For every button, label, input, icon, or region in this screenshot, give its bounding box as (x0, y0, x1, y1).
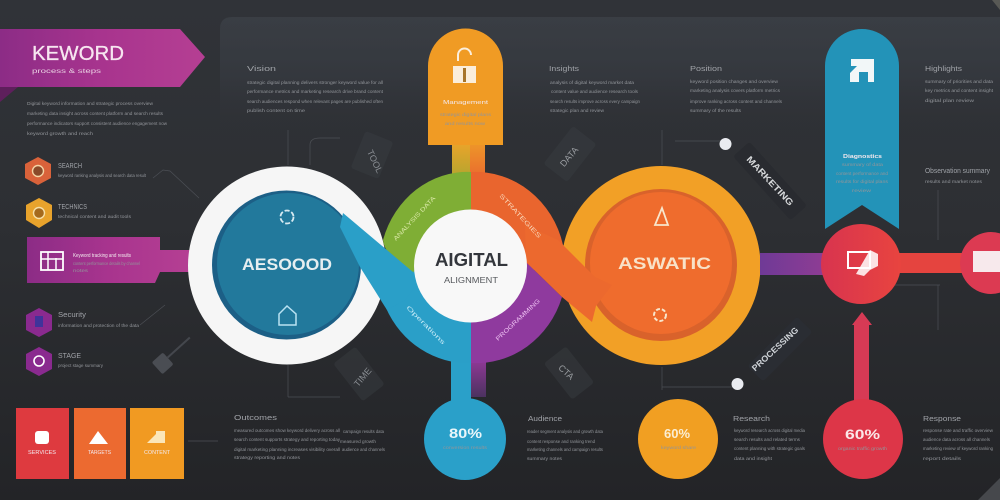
red bottom circle: 60% (845, 426, 881, 442)
center subtitle: ALIGNMENT (444, 276, 498, 285)
icon: padlock (453, 48, 476, 83)
text block: bottom right two: audience data across all channels (923, 437, 991, 442)
text block: top left (247, 66, 384, 113)
icon: gear (654, 309, 666, 321)
text block: right middle: results and market notes (925, 179, 983, 184)
left circle title: AESOOOD (242, 255, 332, 274)
text block: left of blue circle: measured growth (340, 439, 376, 444)
text block: bottom center: marketing channels and campaign results (527, 447, 604, 452)
text block: top far right (925, 66, 994, 103)
text block: top center (549, 66, 640, 113)
corner highlights (978, 0, 1000, 500)
text block: bottom left: measured outcomes show keyword delivery across all (234, 428, 340, 433)
text block: top far right: summary of priorities and data (925, 79, 993, 84)
text block: top left: strategic digital planning delivers stronger keyword value for all (247, 80, 383, 85)
dark label tags with small text: TOOL (365, 148, 384, 175)
center ring: orange stem and pill: and results now (445, 121, 486, 126)
text block: top right one: keyword position changes and overview (690, 79, 779, 84)
text block: bottom left: digital marketing planning increases visibility overall (234, 447, 340, 452)
text block: bottom right two: report details (923, 456, 962, 461)
center ring: orange stem and pill (428, 28, 503, 180)
red up arrow (852, 312, 872, 402)
icon: building (850, 59, 874, 82)
list item: orange hexagon: SEARCH (58, 163, 82, 170)
list item: yellow hexagon: TECHNICS (58, 204, 87, 211)
text block: top center: Insights (549, 66, 580, 73)
magenta tag (27, 237, 190, 283)
ribbon text: review (852, 188, 872, 193)
icon: house (279, 306, 296, 325)
ring label: blue: Operations (405, 305, 446, 346)
ring segment: blue (386, 267, 471, 363)
intro paragraph: Digital keyword information and strategic process overview (27, 101, 154, 106)
yellow bottom circle (638, 399, 718, 479)
text block: bottom right two: response rate and traffic overview (923, 428, 994, 433)
list item: orange hexagon: keyword ranking analysis and search data result (58, 173, 147, 178)
icon: network (280, 210, 294, 224)
orange diagonal band (525, 225, 612, 322)
list item: purple hexagon two: STAGE (58, 353, 81, 360)
bottom card: red (16, 408, 69, 479)
connector lines (140, 130, 940, 441)
intro paragraph: performance indicators support consistent audience engagement now (27, 121, 168, 126)
ring segment: green (383, 172, 471, 276)
center ring: orange stem and pill: Management (443, 100, 489, 106)
text block: bottom right one: content planning with strategic goals (734, 446, 806, 451)
tag text: notes (73, 268, 89, 273)
text block: top left: publish content on time (247, 108, 306, 113)
text block: bottom left: strategy reporting and notes (234, 455, 301, 460)
text block: right middle: Observation summary (925, 168, 990, 175)
text block: top right one: summary of the results (690, 108, 742, 113)
tag text (73, 253, 140, 273)
ring label: green: ANALYSIS DATA (393, 196, 437, 242)
list item: purple hexagon one (26, 308, 139, 337)
yellow bottom circle: 60% (664, 426, 690, 441)
text block: top far right: key metrics and content insight (925, 88, 994, 93)
ring segment: orange (471, 172, 563, 270)
blue bottom circle: 80% (449, 425, 483, 441)
ribbon text: results for digital plans (836, 179, 889, 184)
text block: top center: strategic plan and review (550, 108, 605, 113)
blue diagonal band (340, 213, 420, 310)
intro paragraph: marketing data insight across content platform and search results (27, 111, 164, 116)
text block: top right one (690, 66, 783, 113)
text block: bottom center: Audience (528, 416, 562, 423)
intro paragraph: keyword growth and reach (27, 131, 94, 136)
text block: top left: search audiences respond when relevant pages are published often (247, 99, 383, 104)
list item: yellow hexagon (26, 198, 132, 228)
tag text: Keyword tracking and results (73, 253, 131, 259)
text block: bottom center: reader segment analysis and growth data (527, 429, 603, 434)
text block: top center: search results improve across every campaign (550, 99, 640, 104)
bottom card: yellow: CONTENT (144, 450, 170, 456)
keyword banner arrow (0, 29, 205, 102)
dark label tags with small text: CTA (556, 363, 576, 382)
text block: left of blue circle: audience and channels (342, 447, 386, 452)
text block: bottom left (234, 415, 341, 460)
center ring: orange stem and pill: strategic digital plans (440, 112, 492, 117)
text block: top left: Vision (247, 66, 276, 73)
icon: tower (655, 208, 668, 225)
bottom card: orange (74, 408, 126, 479)
blue ribbon (825, 29, 899, 229)
keyword title: KEWORD (32, 42, 124, 65)
keyword subtitle: process & steps (32, 68, 102, 75)
ribbon text: summary of data (842, 162, 884, 167)
red connector bar (895, 253, 965, 273)
tag text: content performance details by channel (73, 261, 140, 266)
text block: bottom right two: Response (923, 416, 961, 423)
red node circle (821, 224, 901, 304)
text block: right middle (925, 168, 990, 184)
icon: browser window (41, 252, 63, 270)
list item: yellow hexagon: technical content and audit tools (58, 214, 132, 219)
ribbon text (836, 154, 889, 193)
text block: bottom right one: keyword research across digital media (734, 428, 805, 433)
top backing panel (220, 17, 1000, 135)
purple connector bar (760, 253, 824, 275)
text block: left of blue circle (340, 429, 386, 452)
text block: top center: content value and audience research tools (551, 89, 639, 94)
text block: bottom right two: marketing review of keyword ranking (923, 446, 993, 451)
text block: left of blue circle: campaign results data (343, 429, 384, 434)
ring label: purple: PROGRAMMING (495, 298, 542, 342)
center title: AIGITAL (435, 250, 508, 270)
center white circle (414, 210, 527, 322)
text block: bottom center: content response and ranking trend (527, 439, 595, 444)
ribbon text: Diagnostics (843, 154, 882, 160)
white pointer tag top (720, 138, 807, 220)
intro paragraph (27, 101, 168, 136)
text block: top right one: marketing analysis covers platform metrics (690, 88, 781, 93)
text block: bottom right one: search results and related terms (734, 437, 801, 442)
text block: bottom left: Outcomes (234, 415, 278, 422)
bottom stems (451, 355, 486, 410)
dark label tags with small text: DATA (558, 145, 580, 169)
list item: orange hexagon (25, 157, 147, 185)
white pointer tag bottom: PROCESSING (750, 325, 801, 373)
text block: bottom right one: Research (733, 416, 770, 423)
red bottom circle: organic traffic growth (838, 446, 888, 451)
icon: monitor (848, 252, 870, 268)
red node right (960, 232, 1000, 294)
text block: top far right: digital plan review (925, 98, 975, 103)
bottom card: orange: TARGETS (88, 450, 112, 456)
text block: bottom right two (923, 416, 994, 461)
text block: top right one: improve ranking across content and channels (690, 99, 783, 104)
left big circle (188, 166, 386, 364)
list item: purple hexagon two (26, 347, 104, 376)
list item: purple hexagon one: Security (58, 312, 87, 319)
small key tag (152, 332, 196, 374)
icon: page (973, 251, 1000, 272)
text block: top far right: Highlights (925, 66, 963, 73)
text block: bottom center: summary notes (527, 456, 563, 461)
white pointer tag bottom (732, 316, 813, 390)
blue bottom circle (424, 398, 506, 480)
ring label: orange: STRATEGIES (498, 193, 541, 240)
ring segment: purple (471, 262, 562, 363)
yellow bottom circle: keyword share (661, 445, 697, 450)
text block: bottom left: search content supports strategy and reporting today (234, 437, 341, 442)
text block: bottom right one (733, 416, 806, 461)
text block: top center: analysis of digital keyword market data (550, 80, 634, 85)
list item: purple hexagon one: information and protection of the data (58, 323, 139, 328)
ribbon text: content performance and (836, 171, 888, 176)
dark label tags with small text (333, 126, 597, 402)
right circle title: ASWATIC (618, 254, 711, 273)
text block: top left: performance metrics and marketing research drive brand content (247, 89, 384, 94)
white pointer tag top: MARKETING (745, 154, 795, 208)
text block: bottom center (527, 416, 604, 461)
bottom card: yellow (130, 408, 184, 479)
dark label tags with small text: TIME (352, 366, 373, 389)
right big circle (562, 166, 760, 365)
text block: top right one: Position (690, 66, 722, 73)
text block: bottom right one: data and insight (734, 456, 773, 461)
list item: purple hexagon two: project stage summary (58, 363, 104, 368)
red bottom circle (823, 399, 903, 479)
bottom card: red: SERVICES (28, 450, 57, 456)
blue bottom circle: conversion results (443, 445, 488, 450)
